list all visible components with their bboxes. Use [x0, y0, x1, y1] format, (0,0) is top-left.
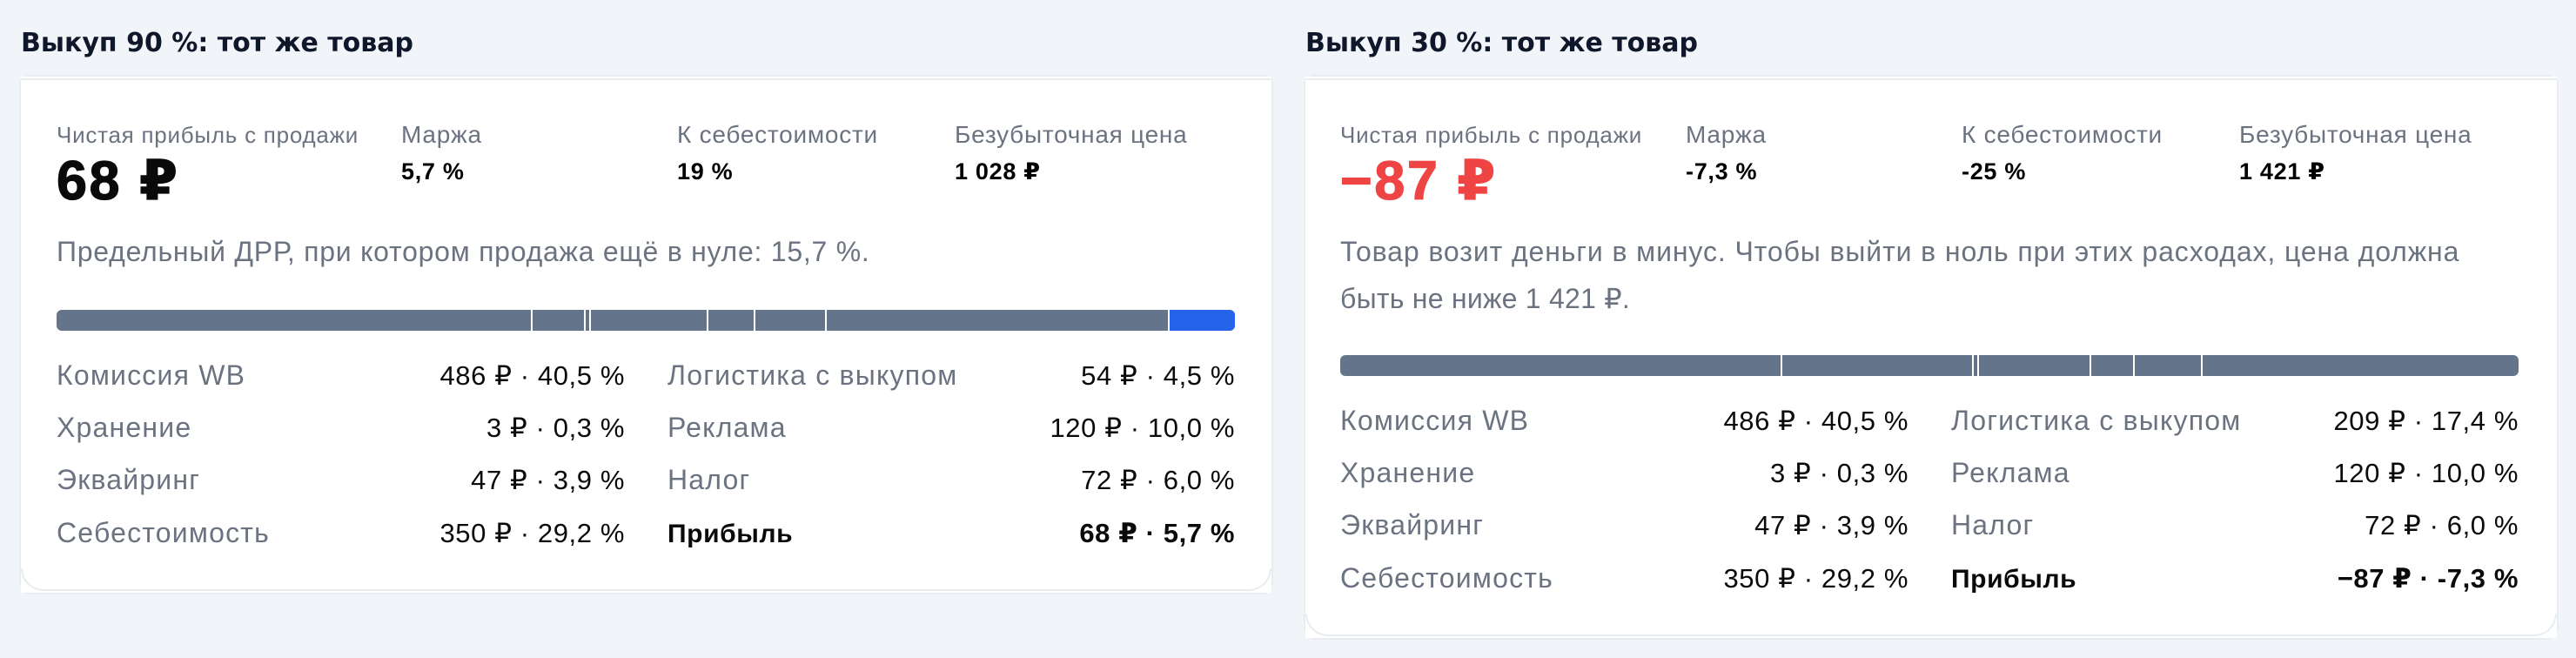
cost table — [1340, 405, 2519, 594]
stat: безубыточная цена: 1 421 ₽ — [2239, 158, 2325, 185]
cost table: Логистика с выкупом — [667, 359, 957, 391]
cost table: Прибыль — [1951, 565, 2076, 594]
cost table: 486 ₽ · 40,5 % — [1723, 406, 1909, 436]
stat: безубыточная цена — [2239, 121, 2472, 185]
cost table: 54 ₽ · 4,5 % — [1081, 360, 1235, 391]
cost table: 486 ₽ · 40,5 % — [439, 360, 625, 391]
stacked cost bar — [1340, 355, 2519, 376]
cost table: Себестоимость — [1340, 562, 1553, 594]
cost table: Прибыль — [667, 520, 793, 548]
cost table: 47 ₽ · 3,9 % — [1754, 510, 1909, 540]
cost table: Эквайринг — [1340, 509, 1484, 540]
cost table: Комиссия WB — [57, 359, 245, 391]
stat: маржа: -7,3 % — [1686, 158, 1757, 185]
cost table: Хранение — [57, 412, 191, 443]
cost table: −87 ₽ · -7,3 % — [2338, 563, 2519, 594]
cost table: Логистика с выкупом — [1951, 405, 2241, 436]
panel: выкуп 90 % — [21, 77, 1271, 593]
cost table: 209 ₽ · 17,4 % — [2333, 406, 2519, 436]
stat: к себестоимости: -25 % — [1962, 158, 2026, 185]
cost table: Хранение — [1340, 457, 1475, 488]
stat: маржа — [401, 121, 482, 185]
stat: маржа — [1686, 121, 1767, 185]
cost table: Себестоимость — [57, 517, 270, 548]
stat: к себестоимости — [677, 121, 878, 185]
stat: чистая прибыль — [1340, 122, 1642, 212]
stat: чистая прибыль: 68 ₽ — [57, 151, 179, 212]
stacked cost bar — [57, 310, 1235, 331]
panel: выкуп 30 % — [1305, 77, 2557, 638]
cost table: Налог — [1951, 509, 2034, 540]
cost table: 350 ₽ · 29,2 % — [439, 518, 625, 548]
cost table: Реклама — [1951, 457, 2070, 488]
stat: маржа: Маржа — [401, 121, 482, 148]
stat: чистая прибыль: −87 ₽ — [1340, 151, 1498, 212]
cost table: Комиссия WB — [1340, 405, 1529, 436]
note text — [1340, 236, 2459, 314]
cost table: 72 ₽ · 6,0 % — [1081, 465, 1235, 495]
stat: маржа: Маржа — [1686, 121, 1767, 148]
note text: Товар возит деньги в минус. Чтобы выйти в ноль при этих расходах, цена должна — [1340, 236, 2459, 267]
heading: Выкуп 30 %: Выкуп 30 %: тот же товар — [1305, 28, 1698, 58]
stat: к себестоимости: К себестоимости — [1962, 121, 2163, 148]
stat: чистая прибыль: Чистая прибыль с продажи — [57, 122, 359, 148]
cost table: 3 ₽ · 0,3 % — [1770, 458, 1909, 488]
stat: безубыточная цена: Безубыточная цена — [2239, 121, 2472, 148]
stat: к себестоимости: 19 % — [677, 158, 733, 185]
stat: к себестоимости: К себестоимости — [677, 121, 878, 148]
stat: безубыточная цена: 1 028 ₽ — [955, 158, 1041, 185]
stat: безубыточная цена: Безубыточная цена — [955, 121, 1187, 148]
cost table: Налог — [667, 464, 750, 495]
note text: быть не ниже 1 421 ₽. — [1340, 283, 1630, 314]
cost table: 120 ₽ · 10,0 % — [2333, 458, 2519, 488]
stat: чистая прибыль — [57, 122, 359, 212]
cost table — [57, 359, 1235, 548]
cost table: 68 ₽ · 5,7 % — [1079, 518, 1235, 548]
stat: к себестоимости — [1962, 121, 2163, 185]
cost table: 350 ₽ · 29,2 % — [1723, 563, 1909, 594]
heading: Выкуп 90 %: Выкуп 90 %: тот же товар — [21, 28, 413, 58]
stat: чистая прибыль: Чистая прибыль с продажи — [1340, 122, 1642, 148]
cost table: Реклама — [667, 412, 787, 443]
stat: безубыточная цена — [955, 121, 1187, 185]
cost table: Эквайринг — [57, 464, 200, 495]
cost table: 120 ₽ · 10,0 % — [1050, 413, 1235, 443]
stat: маржа: 5,7 % — [401, 158, 465, 185]
note text: Предельный ДРР, при котором продажа ещё в нуле: 15,7 %. — [57, 236, 870, 267]
cost table: 72 ₽ · 6,0 % — [2365, 510, 2519, 540]
cost table: 47 ₽ · 3,9 % — [471, 465, 625, 495]
cost table: 3 ₽ · 0,3 % — [486, 413, 625, 443]
